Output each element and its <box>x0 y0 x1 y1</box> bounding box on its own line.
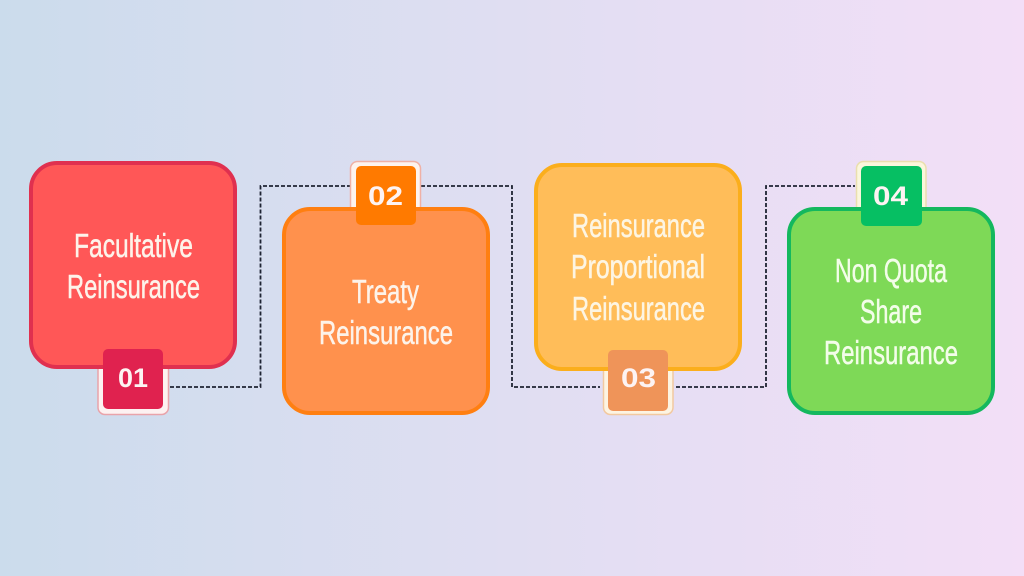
badge 03 <box>608 350 668 411</box>
label: reinsurance proportional reinsurance: Reinsurance <box>572 290 705 327</box>
number 02: 02 <box>368 181 403 211</box>
badge 04 <box>861 166 922 226</box>
label: non quota share reinsurance <box>824 252 958 371</box>
number 03: 03 <box>621 363 656 393</box>
label: non quota share reinsurance: Non Quota <box>835 252 947 289</box>
label: non quota share reinsurance: Reinsurance <box>824 334 958 371</box>
label: facultative reinsurance <box>67 227 200 305</box>
label: facultative reinsurance: Reinsurance <box>67 268 200 305</box>
badge backing 01 <box>98 340 168 414</box>
connector: 01 to 02 <box>170 186 350 387</box>
label: treaty reinsurance <box>319 273 453 351</box>
panel: reinsurance proportional reinsurance <box>536 165 740 414</box>
card 03 <box>536 165 740 369</box>
label: treaty reinsurance: Treaty <box>352 273 419 310</box>
badge backing 02 <box>350 162 420 232</box>
label: reinsurance proportional reinsurance: Reinsurance <box>572 207 705 244</box>
panel: treaty reinsurance <box>284 162 488 413</box>
badge backing 03 <box>604 340 673 414</box>
badge 01 <box>103 349 163 409</box>
connector: 03 to 04 <box>676 186 855 387</box>
card 02 <box>284 209 488 413</box>
badge 02 <box>356 166 416 225</box>
label: reinsurance proportional reinsurance <box>571 207 705 327</box>
card 04 <box>789 209 993 413</box>
number 04: 04 <box>873 181 908 211</box>
label: non quota share reinsurance: Share <box>860 293 922 330</box>
connector: 02 to 03 <box>421 186 600 387</box>
card 01 <box>31 163 235 367</box>
panel: non quota share reinsurance <box>789 162 993 413</box>
label: facultative reinsurance: Facultative <box>74 227 193 264</box>
number 01: 01 <box>118 363 148 393</box>
label: reinsurance proportional reinsurance: Proportional <box>571 248 705 285</box>
label: treaty reinsurance: Reinsurance <box>319 314 453 351</box>
badge backing 04 <box>856 162 926 232</box>
panel: facultative reinsurance <box>31 163 235 414</box>
